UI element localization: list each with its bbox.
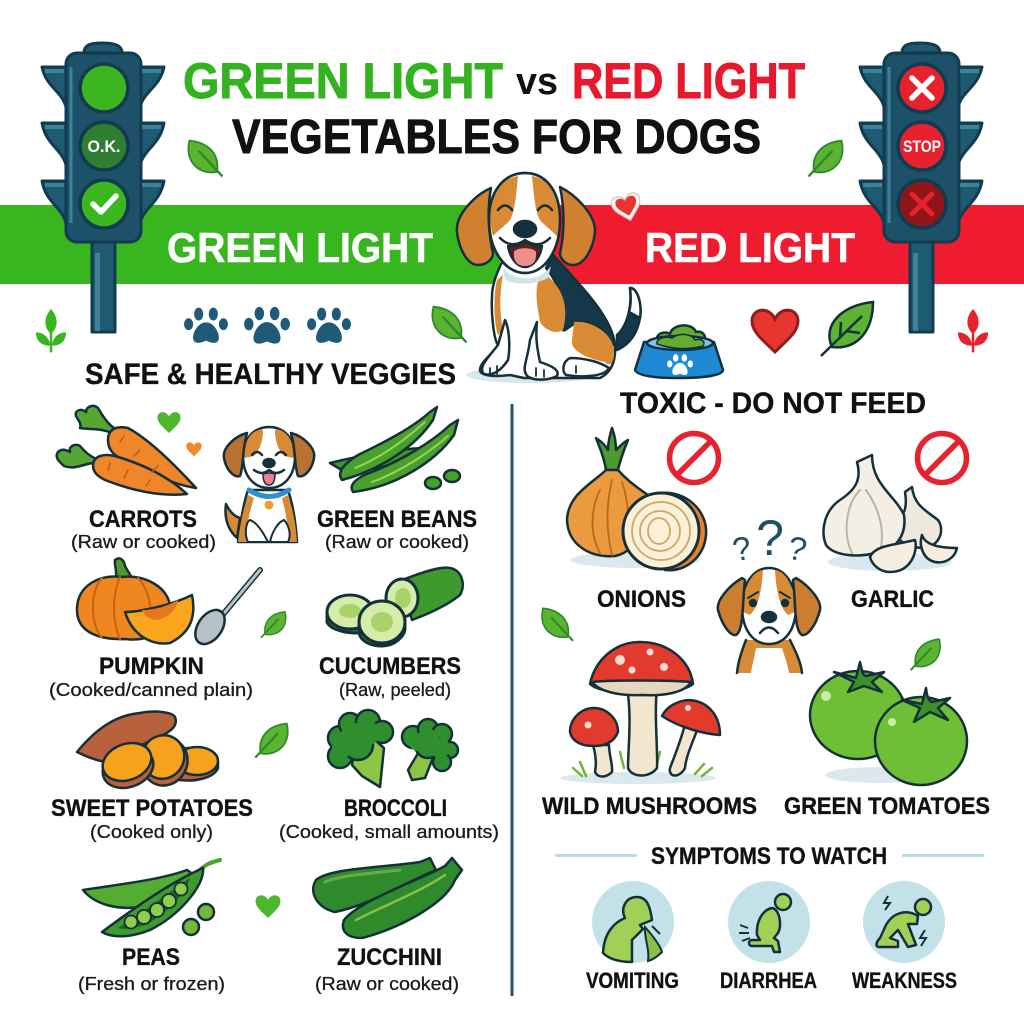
label: pumpkin: PUMPKIN (99, 653, 204, 680)
icon: leaf (432, 307, 466, 342)
label: pumpkin: (Cooked/canned plain) (49, 679, 253, 700)
icon: leaf (911, 639, 940, 670)
label: peas: PEAS (122, 944, 180, 971)
icon: big heart (752, 310, 798, 352)
label: green beans: GREEN BEANS (317, 506, 477, 533)
symptom: vomiting (592, 881, 674, 963)
label: pumpkin (49, 653, 253, 700)
question marks: ? (784, 529, 810, 569)
icon: no sign onion (670, 434, 718, 482)
label: sweet potatoes: (Cooked only) (90, 821, 213, 842)
traffic light: red (860, 43, 982, 332)
label: broccoli: BROCCOLI (344, 795, 447, 822)
icon: leaf (542, 608, 573, 641)
label: weakness: WEAKNESS (852, 968, 957, 993)
label: carrots: CARROTS (89, 506, 197, 533)
title: VEGETABLES FOR DOGS (232, 111, 761, 164)
traffic light: green: O.K. (88, 137, 120, 156)
label: green beans: (Raw or cooked) (325, 531, 469, 552)
band label: green light: GREEN LIGHT (167, 224, 433, 271)
icon: leaf (255, 724, 288, 758)
spoon (189, 570, 260, 649)
label: garlic: GARLIC (851, 586, 934, 613)
title: RED LIGHT (572, 53, 805, 109)
label: vomiting: VOMITING (586, 968, 679, 993)
question marks: ? (756, 510, 784, 566)
carrots (57, 406, 196, 495)
icon: no sign garlic (918, 434, 966, 482)
icon: green heart (256, 895, 280, 918)
green tomatoes (810, 662, 967, 785)
sad puppy (718, 568, 820, 673)
icon: green sprout (36, 309, 66, 352)
question marks (729, 510, 810, 569)
label: peas: (Fresh or frozen) (78, 973, 225, 994)
icon: paw (244, 307, 290, 344)
title: vs (516, 61, 558, 103)
icon: leaf (188, 141, 222, 176)
peas (83, 860, 220, 936)
label: zucchini: ZUCCHINI (337, 944, 442, 971)
label: zucchini: (Raw or cooked) (315, 973, 459, 994)
icon: paw (184, 308, 228, 343)
traffic light: red: STOP (903, 137, 941, 156)
label: peas (78, 944, 225, 994)
symptoms heading (555, 843, 984, 870)
dog bowl (635, 325, 723, 378)
label: onions: ONIONS (597, 586, 686, 613)
dog mascot (457, 173, 641, 383)
sweet potatoes (77, 712, 218, 795)
icon: leaf (261, 612, 286, 638)
icon: leaf (808, 141, 843, 176)
label: broccoli: (Cooked, small amounts) (279, 821, 499, 842)
icon: green heart (158, 412, 180, 433)
question marks: ? (729, 529, 754, 568)
band label: red light: RED LIGHT (645, 224, 855, 271)
green beans (330, 407, 460, 492)
pumpkin (77, 558, 193, 643)
green band (0, 205, 500, 284)
title (183, 53, 805, 164)
icon: orange heart (186, 442, 202, 456)
label: cucumbers: CUCUMBERS (319, 653, 461, 680)
label: green tomatoes: GREEN TOMATOES (784, 793, 990, 820)
label: diarrhea: DIARRHEA (720, 968, 817, 993)
symptom: diarrhea (728, 881, 810, 963)
wild mushrooms (560, 642, 720, 784)
label: green beans (317, 506, 477, 552)
label: sweet potatoes: SWEET POTATOES (51, 795, 253, 822)
garlic (824, 455, 957, 572)
cucumbers (327, 568, 463, 646)
symptoms heading: SYMPTOMS TO WATCH (651, 843, 887, 870)
onion (567, 428, 706, 570)
label: zucchini (315, 944, 459, 994)
heading: toxic: TOXIC - DO NOT FEED (620, 387, 926, 420)
broccoli (328, 710, 458, 787)
label: wild mushrooms: WILD MUSHROOMS (542, 793, 757, 820)
label: cucumbers: (Raw, peeled) (339, 679, 451, 700)
icon: big leaf (821, 302, 873, 356)
heading: safe and healthy: SAFE & HEALTHY VEGGIES (85, 358, 456, 391)
label: sweet potatoes (51, 795, 253, 842)
icon: paw (307, 308, 351, 343)
icon: red sprout (958, 309, 988, 352)
icon: small heart (610, 191, 644, 224)
label: broccoli (279, 795, 499, 842)
label: cucumbers (319, 653, 461, 700)
panel divider (510, 404, 514, 996)
traffic light: green (42, 43, 164, 332)
symptom: weakness (863, 881, 945, 963)
label: carrots: (Raw or cooked) (71, 531, 216, 552)
label: carrots (71, 506, 216, 552)
title: GREEN LIGHT (183, 53, 503, 109)
red band (550, 205, 1024, 284)
puppy with collar (224, 427, 314, 542)
zucchini (313, 858, 462, 938)
